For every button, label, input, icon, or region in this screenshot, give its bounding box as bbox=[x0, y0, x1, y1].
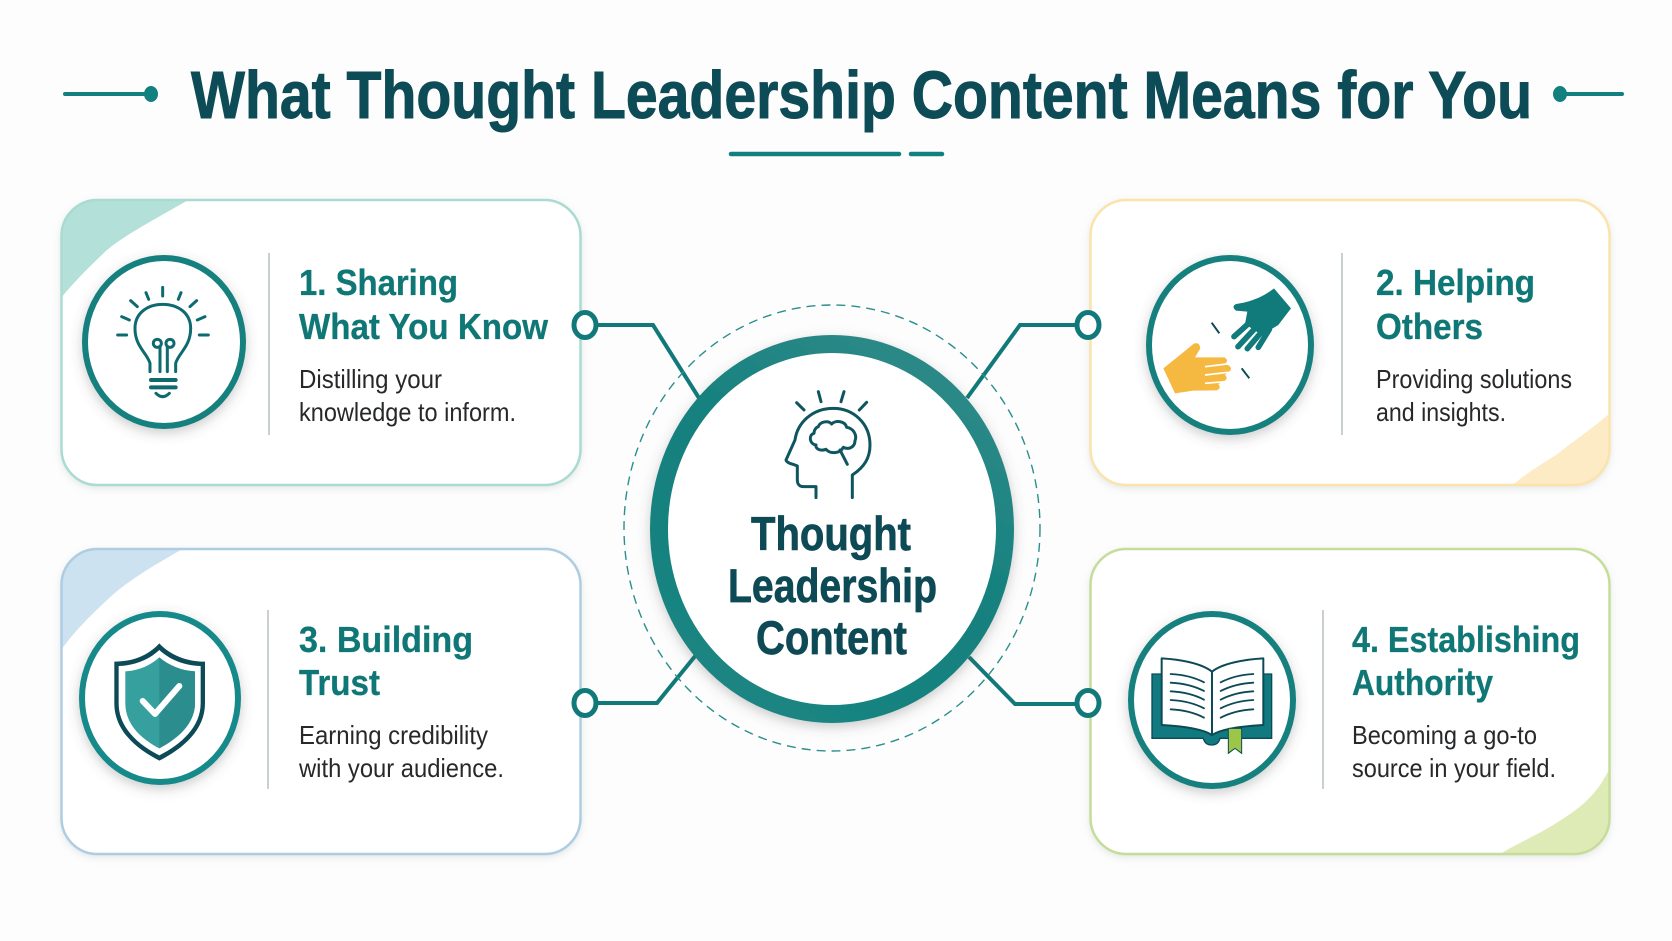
connector: card 4 to centre bbox=[969, 657, 1076, 704]
description 4: Becoming a go-to bbox=[1352, 720, 1537, 750]
connector: card 1 to centre bbox=[597, 325, 699, 398]
icon: open book bbox=[1131, 614, 1293, 786]
description 1 bbox=[299, 364, 516, 427]
connector node: card 2 bbox=[1077, 312, 1099, 338]
heading 4: 4. Establishing bbox=[1352, 619, 1580, 660]
divider bbox=[1341, 253, 1343, 435]
description 3 bbox=[298, 720, 504, 783]
description 4 bbox=[1352, 720, 1556, 783]
description 2: and insights. bbox=[1376, 397, 1506, 427]
connector: card 2 to centre bbox=[967, 325, 1076, 398]
panel: helping others bbox=[1090, 199, 1610, 485]
description 2: Providing solutions bbox=[1376, 364, 1572, 394]
description 3: with your audience. bbox=[298, 753, 504, 783]
heading 2: 2. Helping bbox=[1376, 262, 1535, 303]
hub label: Thought bbox=[751, 507, 911, 560]
panel: establishing authority bbox=[1090, 548, 1610, 854]
connector node: card 1 bbox=[574, 312, 596, 338]
divider bbox=[1322, 610, 1324, 789]
central hub bbox=[659, 344, 1005, 714]
description 3: Earning credibility bbox=[299, 720, 488, 750]
heading 4: Authority bbox=[1352, 662, 1493, 703]
divider bbox=[268, 253, 270, 435]
heading 1: 1. Sharing bbox=[299, 262, 458, 303]
heading 3: Trust bbox=[299, 662, 380, 703]
icon: lightbulb bbox=[85, 258, 243, 426]
heading 3: 3. Building bbox=[299, 619, 473, 660]
panel: building trust bbox=[61, 548, 581, 854]
hub label: Content bbox=[756, 611, 907, 664]
hub label bbox=[728, 507, 937, 664]
heading 4 bbox=[1352, 619, 1580, 703]
title left accent bbox=[65, 86, 158, 102]
heading 2: Others bbox=[1376, 306, 1483, 347]
heading 2 bbox=[1376, 262, 1535, 347]
icon: head with brain bbox=[786, 392, 870, 498]
title underline bbox=[731, 152, 942, 156]
dashed orbit bbox=[624, 305, 1040, 751]
icon: helping hands bbox=[1149, 258, 1311, 432]
connector: card 3 to centre bbox=[597, 655, 696, 703]
heading 3 bbox=[299, 619, 473, 703]
title right accent bbox=[1553, 86, 1622, 102]
description 2 bbox=[1376, 364, 1572, 427]
description 4: source in your field. bbox=[1352, 753, 1556, 783]
hub label: Leadership bbox=[728, 559, 937, 612]
heading 1: What You Know bbox=[299, 306, 549, 347]
connector node: card 4 bbox=[1077, 690, 1099, 716]
divider bbox=[267, 610, 269, 789]
panel: sharing what you know bbox=[61, 199, 581, 485]
icon: shield bbox=[82, 614, 238, 782]
description 1: knowledge to inform. bbox=[299, 397, 516, 427]
connector node: card 3 bbox=[574, 690, 596, 716]
heading 1 bbox=[299, 262, 549, 347]
description 1: Distilling your bbox=[299, 364, 442, 394]
